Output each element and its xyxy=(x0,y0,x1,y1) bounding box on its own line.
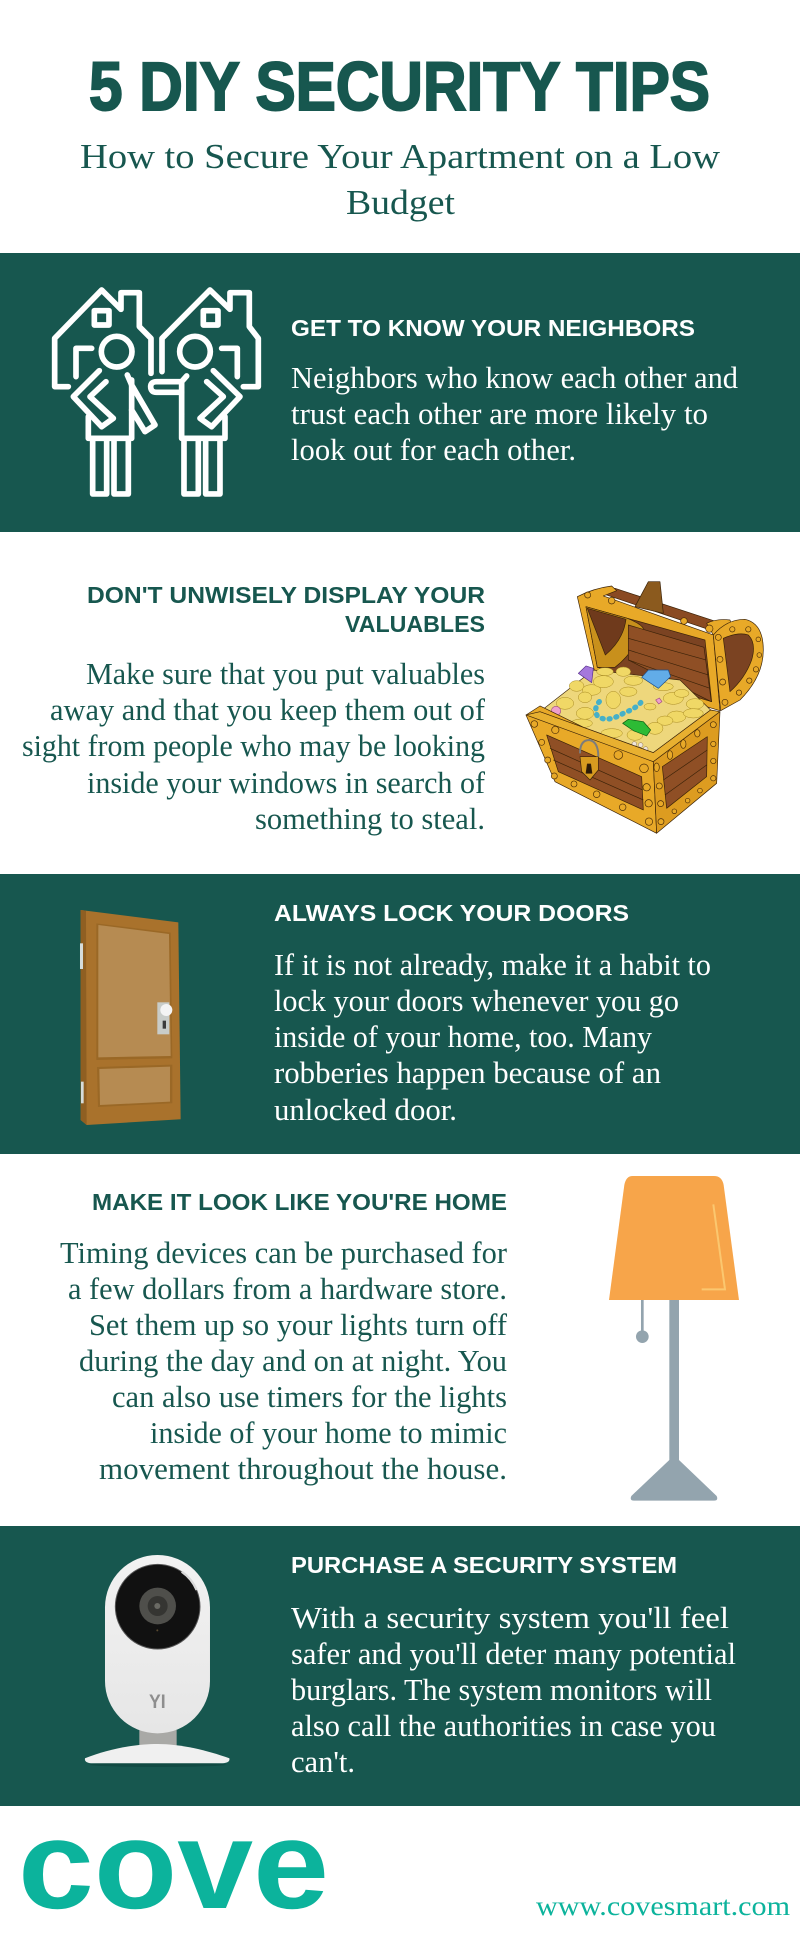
website url: www.covesmart.com xyxy=(536,1891,790,1921)
body text: unlocked door. xyxy=(274,1092,457,1127)
panel: make it look like you're home xyxy=(0,1154,800,1526)
body text: If it is not already, make it a habit to xyxy=(274,947,711,982)
body text: also call the authorities in case you xyxy=(291,1708,716,1743)
body text: can also use timers for the lights xyxy=(112,1379,507,1414)
body text: Neighbors who know each other and xyxy=(291,360,738,395)
heading xyxy=(87,582,485,637)
body text xyxy=(60,1235,508,1486)
heading: GET TO KNOW YOUR NEIGHBORS xyxy=(291,315,695,341)
body text: With a security system you'll feel xyxy=(291,1600,729,1635)
body text: look out for each other. xyxy=(291,432,576,467)
body text: sight from people who may be looking xyxy=(22,728,485,763)
icon: lamp xyxy=(609,1176,739,1501)
body text: can't. xyxy=(291,1744,355,1779)
body text xyxy=(291,1600,736,1779)
body text: safer and you'll deter many potential xyxy=(291,1636,736,1671)
body text: a few dollars from a hardware store. xyxy=(68,1271,507,1306)
body text: trust each other are more likely to xyxy=(291,396,708,431)
subtitle: Budget xyxy=(346,183,455,222)
heading: ALWAYS LOCK YOUR DOORS xyxy=(274,900,629,926)
body text: inside your windows in search of xyxy=(87,765,486,800)
body text xyxy=(274,947,711,1127)
logo: cove: cove xyxy=(18,1794,329,1934)
body text xyxy=(291,360,738,467)
icon: treasure chest xyxy=(526,582,763,833)
body text: inside of your home, too. Many xyxy=(274,1019,652,1054)
body text: during the day and on at night. You xyxy=(79,1343,507,1378)
body text: something to steal. xyxy=(255,801,485,836)
body text: burglars. The system monitors will xyxy=(291,1672,712,1707)
body text: Make sure that you put valuables xyxy=(86,656,485,691)
panel: always lock your doors xyxy=(0,874,800,1154)
body text: away and that you keep them out of xyxy=(50,692,486,727)
body text: movement throughout the house. xyxy=(99,1451,507,1486)
subtitle: How to Secure Your Apartment on a Low xyxy=(80,137,721,176)
icon: security camera xyxy=(85,1555,229,1767)
body text: lock your doors whenever you go xyxy=(274,983,679,1018)
icon: two neighbors and houses xyxy=(55,290,258,494)
heading: PURCHASE A SECURITY SYSTEM xyxy=(291,1552,677,1578)
body text: robberies happen because of an xyxy=(274,1055,661,1090)
heading: MAKE IT LOOK LIKE YOU'RE HOME xyxy=(92,1189,507,1215)
panel: purchase a security system xyxy=(0,1526,800,1806)
panel: don't unwisely display your valuables xyxy=(0,532,800,874)
body text xyxy=(22,656,486,836)
subtitle xyxy=(80,137,721,222)
heading: VALUABLES xyxy=(345,611,485,637)
body text: Timing devices can be purchased for xyxy=(60,1235,508,1270)
panel: get to know your neighbors xyxy=(0,253,800,532)
body text: inside of your home to mimic xyxy=(150,1415,507,1450)
body text: Set them up so your lights turn off xyxy=(89,1307,508,1342)
camera logo text: YI xyxy=(149,1692,166,1713)
heading: DON'T UNWISELY DISPLAY YOUR xyxy=(87,582,485,608)
icon: door xyxy=(80,910,181,1125)
title: 5 DIY SECURITY TIPS xyxy=(89,48,710,125)
